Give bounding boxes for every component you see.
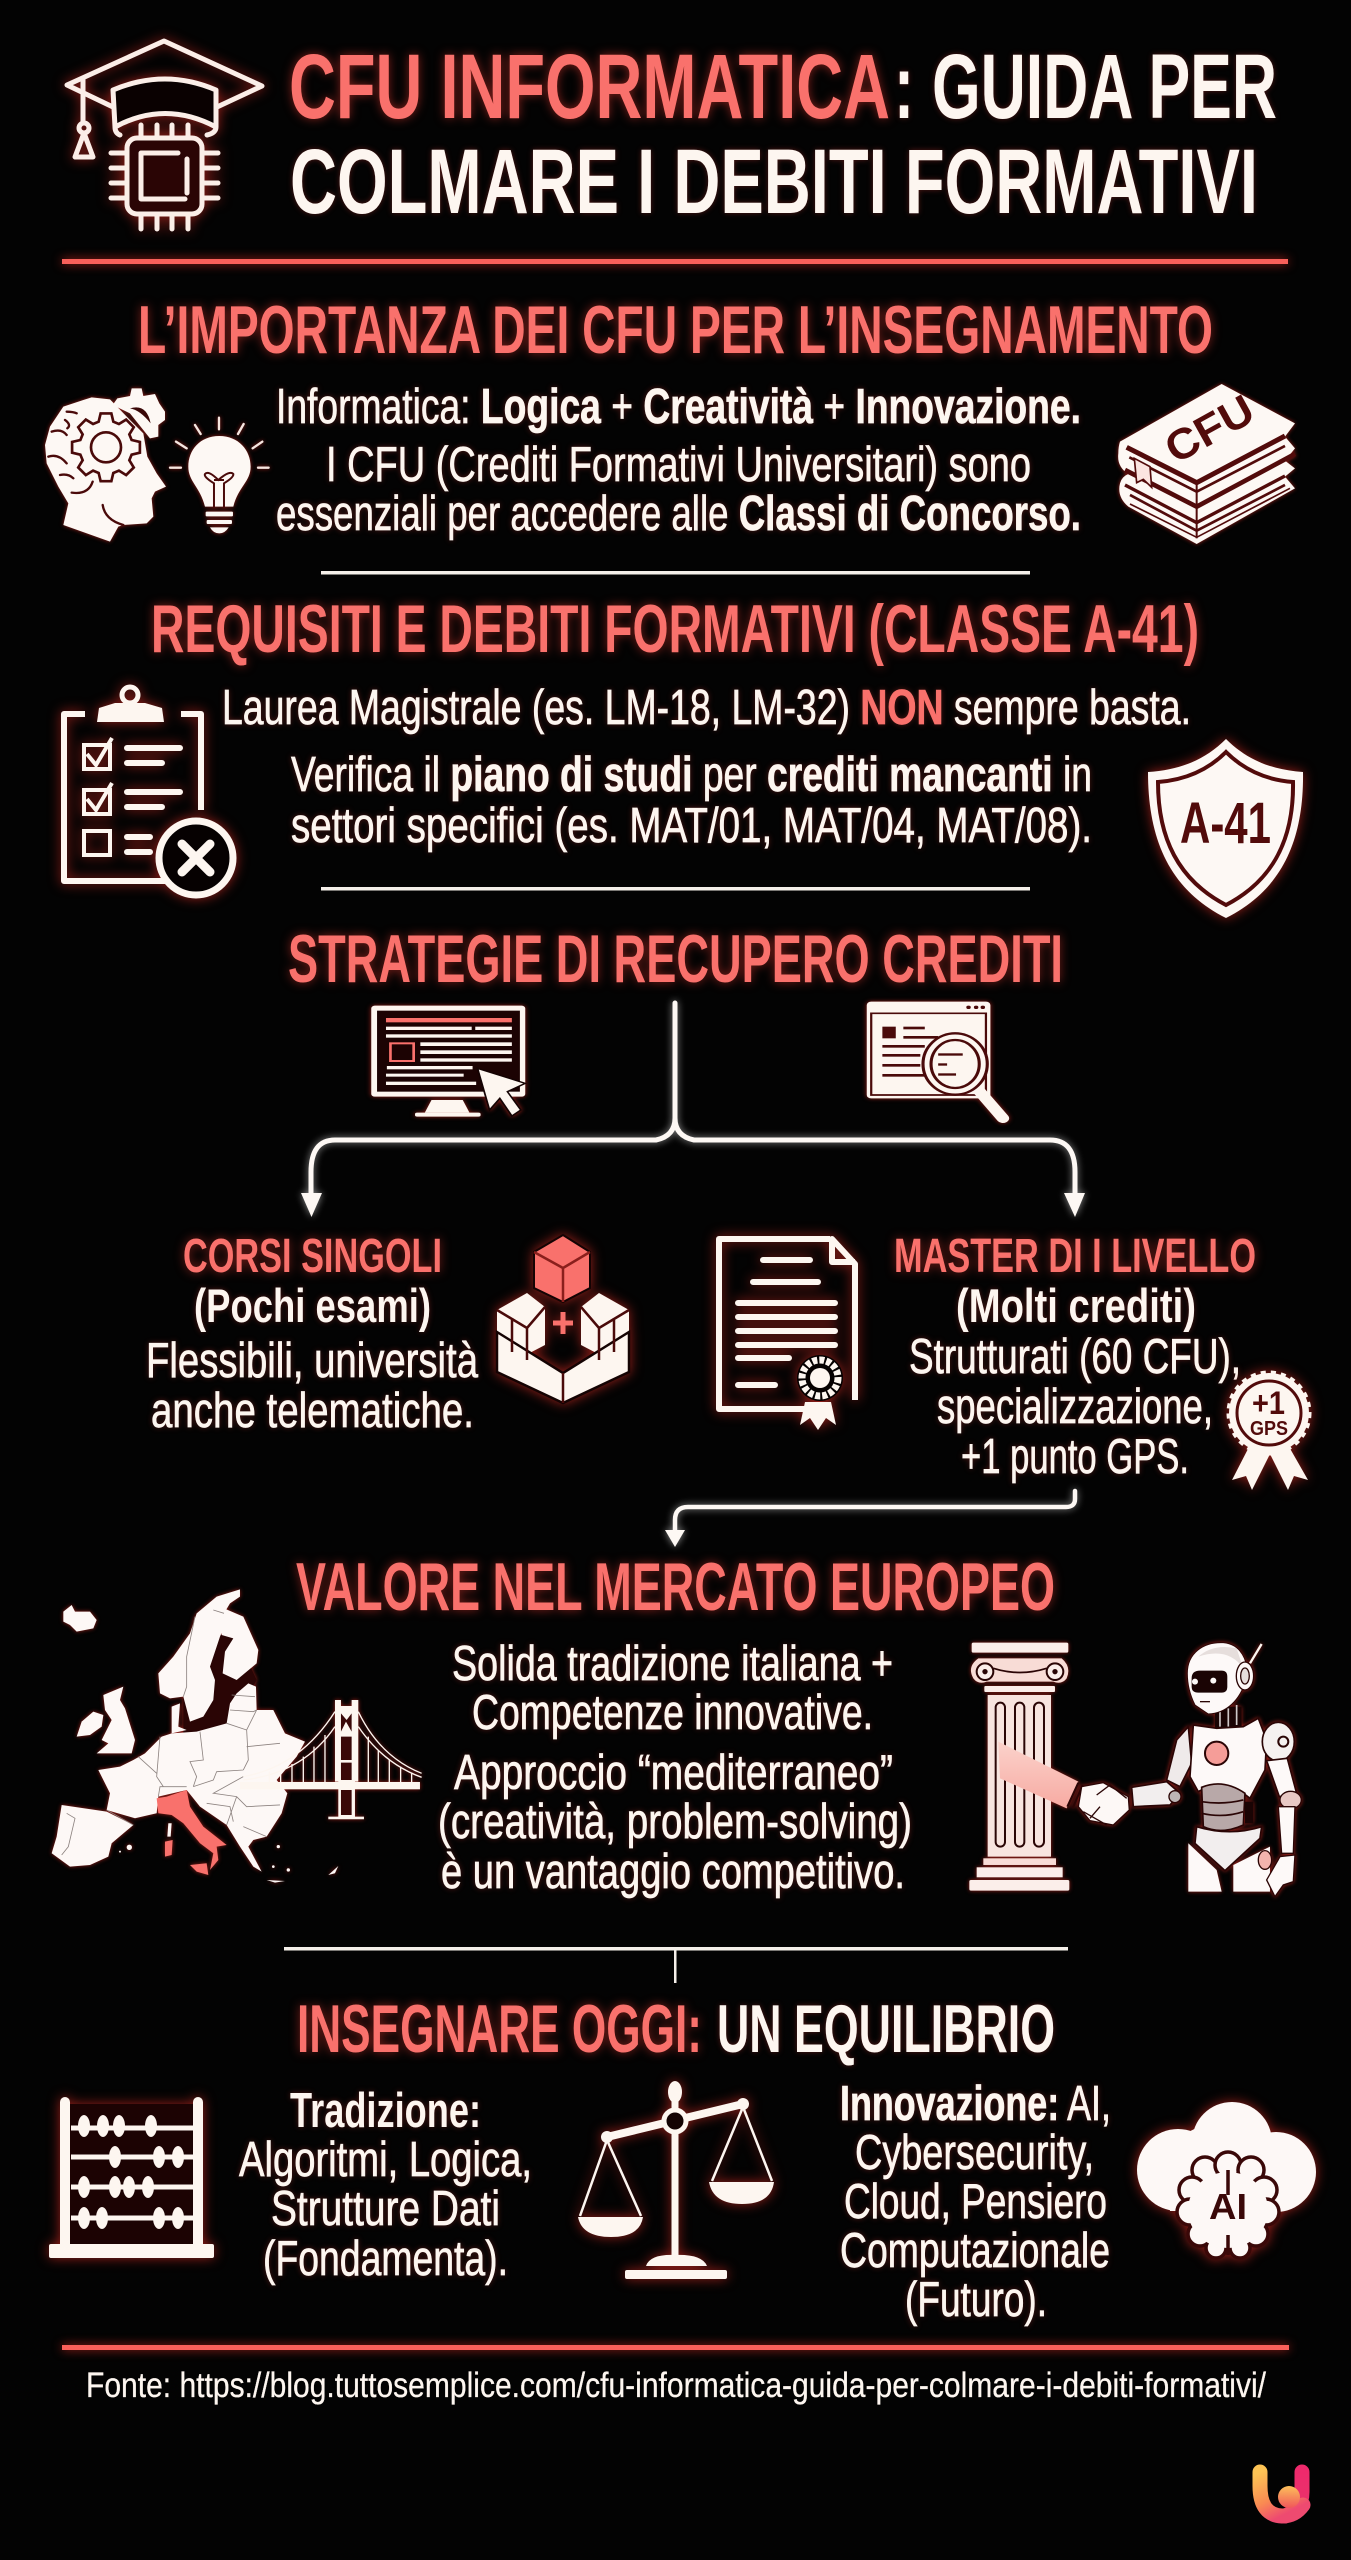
text: tradizione: [239, 2084, 532, 2286]
text: requisiti: [222, 681, 1191, 853]
text: informatica e CFU: essenziali per accedere alle Classi di Concorso.: [276, 487, 1081, 541]
logo: [1260, 2472, 1303, 2516]
icon: AI cloud brain: [1137, 2102, 1316, 2258]
text: innovazione: Innovazione: AI,: [840, 2077, 1111, 2131]
text: tradizione: (Fondamenta).: [263, 2232, 508, 2286]
text: informatica e CFU: Informatica: Logica + Creatività + Innovazione.: [276, 380, 1081, 434]
icon: balance scale: [578, 2081, 774, 2279]
text: requisiti: settori specifici (es. MAT/01, MAT/04, MAT/08).: [291, 799, 1092, 853]
text: tradizione: Tradizione:: [290, 2084, 481, 2138]
heading: corsi singoli: CORSI SINGOLI: [183, 1230, 442, 1283]
panel: corsi singoli: [146, 1230, 479, 1438]
icon: graduation cap with chip: [67, 41, 262, 229]
text: valore nel mercato: è un vantaggio competitivo.: [441, 1845, 905, 1899]
text: innovazione: (Futuro).: [905, 2273, 1047, 2327]
text: corsi singoli: anche telematiche.: [151, 1384, 474, 1438]
icon: browser with magnifier: [867, 1002, 1003, 1118]
icon: AI cloud brain: AI: [1209, 2186, 1247, 2227]
title: CFU INFORMATICA: [289, 36, 890, 138]
icon: checklist clipboard: [64, 687, 233, 895]
text: corsi singoli: (Pochi esami): [194, 1279, 431, 1332]
text: master: specializzazione,: [937, 1380, 1213, 1434]
panel: master di I livello: [894, 1230, 1256, 1484]
text: requisiti: Verifica il piano di studi per crediti mancanti in: [291, 748, 1092, 802]
text: valore nel mercato: [438, 1637, 912, 1899]
text: innovazione: Cybersecurity,: [855, 2126, 1094, 2180]
title: :: [894, 36, 914, 138]
icon: +1 GPS badge: [1229, 1373, 1309, 1490]
text: master: [909, 1279, 1241, 1484]
map: Europe with Italy and bridge: [52, 1589, 422, 1883]
icon: column and robot handshake: [969, 1643, 1301, 1897]
text: master: (Molti crediti): [956, 1279, 1196, 1332]
icon: CFU books: [1118, 384, 1295, 544]
icon: abacus: [49, 2102, 214, 2258]
icon: head with gears: [45, 388, 269, 542]
heading: insegnare oggi: UN EQUILIBRIO: [717, 1991, 1055, 2067]
text: master: Strutturati (60 CFU),: [909, 1330, 1241, 1384]
text: corsi singoli: Flessibili, università: [146, 1334, 479, 1388]
title: [289, 36, 1277, 233]
icon: CFU books: CFU: [1157, 386, 1262, 473]
text: innovazione: [840, 2077, 1111, 2327]
icon: A-41 shield: [1148, 739, 1303, 918]
text: master: +1 punto GPS.: [961, 1430, 1189, 1484]
heading: insegnare oggi: INSEGNARE OGGI:: [297, 1991, 702, 2067]
text: informatica e CFU: I CFU (Crediti Formativi Universitari) sono: [326, 438, 1031, 492]
arrow: split to two strategies: [301, 1003, 1085, 1217]
icon: +1 GPS badge: GPS: [1250, 1418, 1288, 1440]
arrow: to european market: [665, 1491, 1075, 1547]
icon: monitor with cursor: [371, 1006, 525, 1117]
text: innovazione: Computazionale: [840, 2224, 1110, 2278]
icon: building blocks: [497, 1235, 629, 1403]
text: requisiti: Laurea Magistrale (es. LM-18, LM-32) NON sempre basta.: [222, 681, 1191, 735]
text: valore nel mercato: (creatività, problem-solving): [438, 1795, 912, 1849]
text: corsi singoli: [146, 1279, 479, 1438]
text: valore nel mercato: Solida tradizione italiana +: [452, 1637, 893, 1691]
text: informatica e CFU: [276, 380, 1081, 541]
icon: certificate document: [719, 1239, 855, 1430]
text: tradizione: Algoritmi, Logica,: [239, 2133, 532, 2187]
text: tradizione: Strutture Dati: [271, 2182, 500, 2236]
text: valore nel mercato: Competenze innovative.: [472, 1686, 873, 1740]
icon: +1 GPS badge: +1: [1252, 1385, 1285, 1421]
text: innovazione: Cloud, Pensiero: [844, 2175, 1107, 2229]
icon: A-41 shield: A-41: [1180, 791, 1271, 856]
text: valore nel mercato: Approccio “mediterraneo”: [454, 1746, 893, 1800]
